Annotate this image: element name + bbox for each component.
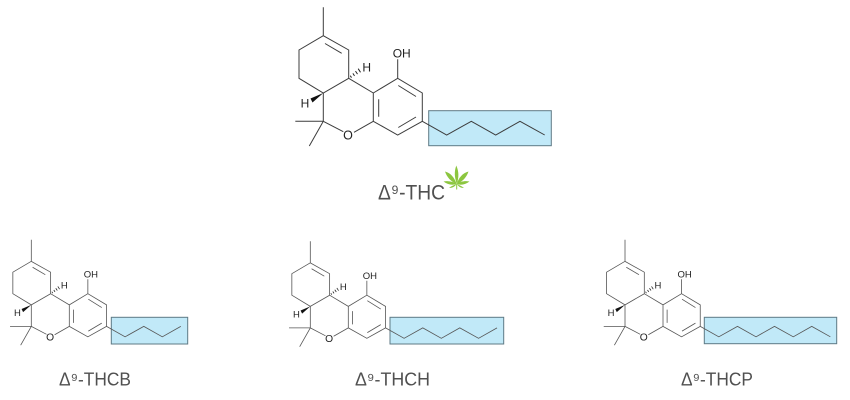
skeleton: THCB: OH xyxy=(84,270,98,281)
skeleton: THCP: O xyxy=(640,333,648,344)
skeleton: THCP: OH xyxy=(677,270,692,281)
label: delta-9-THC: Δ⁹-THC xyxy=(378,182,445,204)
highlight box: THC side chain xyxy=(429,111,551,146)
highlight box: THCP side chain xyxy=(704,317,837,344)
label: delta-9-THCH: Δ⁹-THCH xyxy=(355,370,430,390)
skeleton: THC core: O xyxy=(343,128,353,142)
skeleton: THCP xyxy=(604,240,830,345)
skeleton: THCB: O xyxy=(46,333,54,344)
molecule: delta-9-THC xyxy=(295,7,551,146)
label: delta-9-THCB: Δ⁹-THCB xyxy=(59,370,131,390)
highlight box: THCH side chain xyxy=(390,317,504,344)
skeleton: THC core: H xyxy=(301,96,309,110)
skeleton: THC core xyxy=(295,7,422,146)
skeleton: THCP: H xyxy=(608,308,615,319)
skeleton: THCH: OH xyxy=(363,271,377,282)
icon: cannabis leaf xyxy=(444,166,470,190)
skeleton: THC core: OH xyxy=(393,46,411,60)
skeleton: THCH: H xyxy=(340,282,347,293)
skeleton: THCH xyxy=(289,241,497,347)
molecule: delta-9-THCP xyxy=(604,240,837,345)
skeleton: THCB: H xyxy=(14,308,21,319)
label: delta-9-THCP: Δ⁹-THCP xyxy=(681,370,753,390)
skeleton: THCH: H xyxy=(293,309,300,320)
skeleton: THCH: O xyxy=(325,334,333,345)
skeleton: THC core: H xyxy=(362,60,371,74)
molecule: delta-9-THCB xyxy=(10,240,188,345)
skeleton: THCB xyxy=(10,240,181,345)
skeleton: THCB: H xyxy=(61,281,68,292)
side chain: pentyl xyxy=(422,121,545,135)
skeleton: THCP: H xyxy=(655,281,662,292)
molecule: delta-9-THCH xyxy=(289,241,504,347)
highlight box: THCB side chain xyxy=(111,317,188,344)
